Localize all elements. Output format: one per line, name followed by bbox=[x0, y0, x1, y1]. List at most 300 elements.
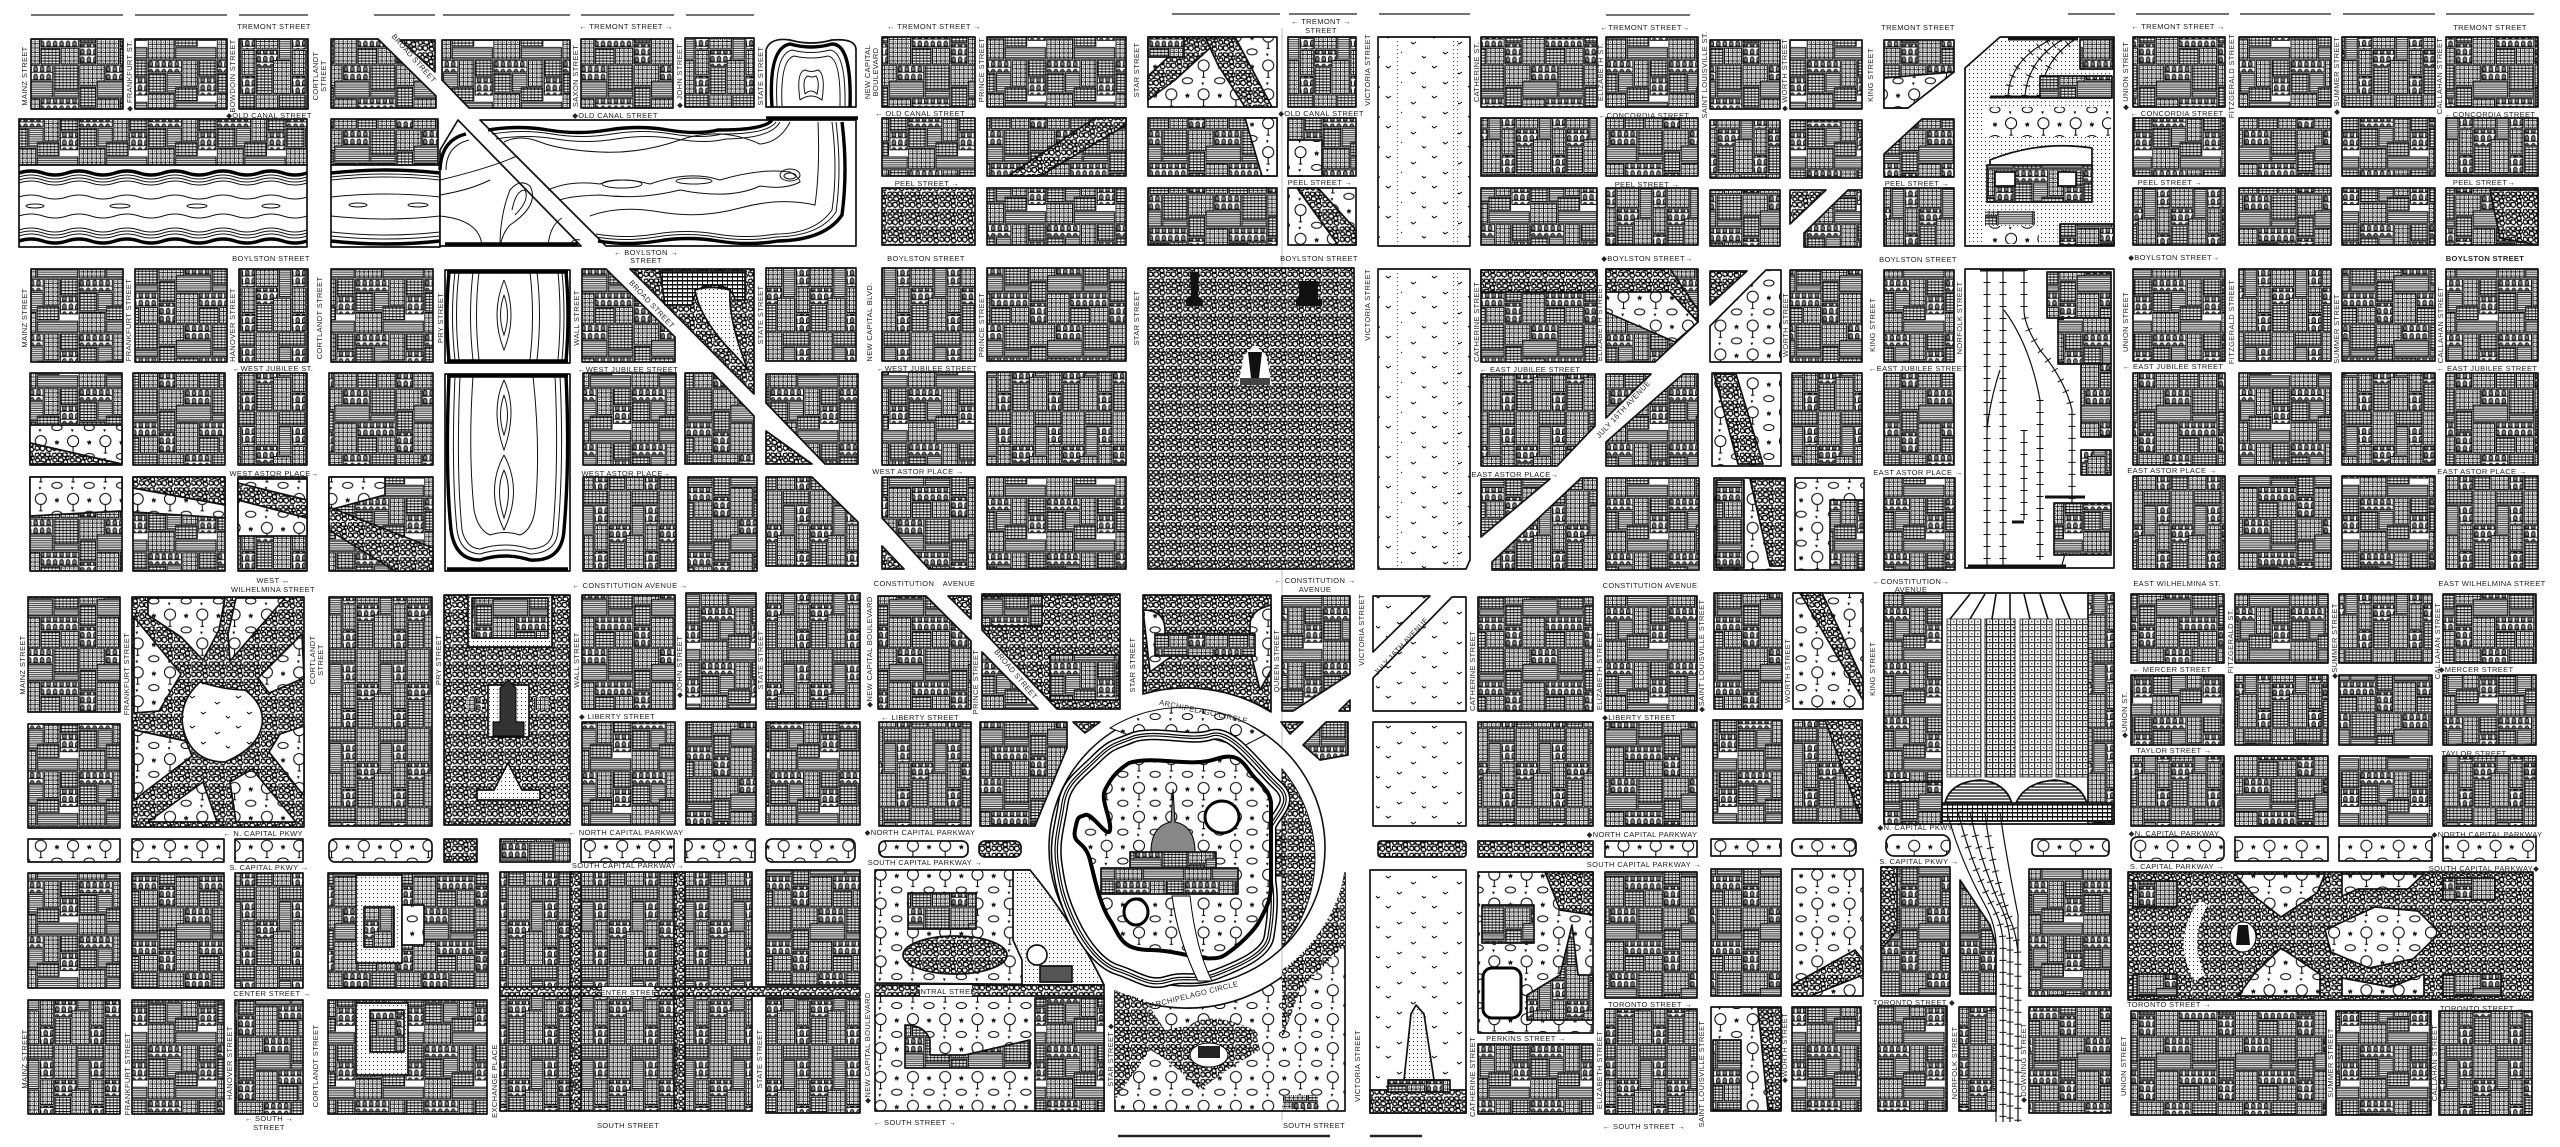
block: State Boylston bbox=[766, 268, 856, 361]
label: Pry Street: PRY STREET bbox=[434, 635, 443, 685]
block: Prince Boylston bbox=[987, 268, 1126, 361]
label: Street: STREET bbox=[319, 60, 328, 92]
label: Avenue: AVENUE bbox=[1895, 585, 1927, 594]
label: Concordia Street: ← CONCORDIA STREET bbox=[2131, 109, 2224, 118]
block: Union Boylston bbox=[2133, 269, 2225, 361]
building: Catherine Capital west bbox=[1482, 905, 1534, 943]
block: Mainz Capital bbox=[28, 873, 120, 988]
block: Saint Louisville Toronto bbox=[1711, 1007, 1781, 1111]
block: Fitzgerald Mercer bbox=[2235, 675, 2328, 745]
label: Boylston Street: ◆BOYLSTON STREET→ bbox=[1601, 254, 1693, 263]
label: Archipelago Circle north: ARCHIPELAGO CIRCLE bbox=[1159, 698, 1249, 725]
block: Mainz Liberty bbox=[28, 724, 120, 828]
label: Exchange Place: EXCHANGE PLACE bbox=[490, 1044, 499, 1118]
block: Worth Toronto bbox=[1792, 1007, 1861, 1111]
block: State Liberty bbox=[766, 722, 860, 825]
label: Street: STREET bbox=[253, 1123, 285, 1132]
label: Tremont Street: TREMONT STREET bbox=[1881, 23, 1955, 32]
lake: north basin at State Street bbox=[766, 39, 856, 107]
park: South Street lawn bbox=[875, 996, 1104, 1111]
parkway: New Capital bbox=[879, 841, 968, 857]
block: New Capital Astor bbox=[882, 477, 975, 569]
block: Worth Tremont bbox=[1790, 40, 1862, 109]
block: Frankfurt Boylston bbox=[135, 269, 227, 362]
label: Frankfurt Street: FRANKFURT STREET bbox=[122, 633, 131, 715]
parkway: Summer bbox=[2339, 837, 2432, 861]
statue: north-west warrior bbox=[1186, 272, 1203, 306]
block: Cortlandt Capital bbox=[328, 873, 488, 988]
block: Mainz Jubilee bbox=[30, 373, 122, 465]
label: Catherine St: CATHERINE ST. bbox=[1472, 42, 1481, 102]
park: Worth Wilhelmina bbox=[1793, 593, 1863, 709]
park: train station forecourt bbox=[1965, 37, 2114, 246]
label: John Street: ◆ JOHN STREET bbox=[675, 44, 684, 108]
block: Prince Old Canal bbox=[987, 118, 1126, 176]
lodge at South Street bbox=[1283, 1095, 1318, 1109]
sheet seam line bbox=[1281, 28, 1283, 1120]
label: Taylor Street: TAYLOR STREET → bbox=[2441, 749, 2517, 758]
block: Catherine Old Canal bbox=[1481, 118, 1597, 176]
label: Tremont Street: ← TREMONT STREET → bbox=[887, 22, 981, 31]
block: Union Toronto bbox=[2131, 1011, 2326, 1115]
cobble band: King Capital bbox=[1881, 867, 1897, 950]
garden: Mainz Astor bbox=[30, 477, 122, 516]
park: Victoria Street middle lawn bbox=[1378, 269, 1470, 569]
label: Toronto Street: TORONTO STREET → bbox=[2440, 1004, 2524, 1013]
cobble patch: Old City Wall bbox=[1606, 269, 1698, 322]
wedge: cobble triangle bbox=[882, 546, 904, 569]
label: South Street: ← SOUTH STREET → bbox=[874, 1118, 956, 1127]
park overlays on west blocks bbox=[30, 425, 433, 571]
garden: Star Old Canal bbox=[1245, 118, 1277, 176]
block: Fitzgerald Taylor bbox=[2235, 756, 2328, 826]
Archipelago disc: central island palace bbox=[1049, 708, 1325, 986]
label: Catherine Street: CATHERINE STREET bbox=[1468, 631, 1477, 711]
parkway: Union bbox=[2131, 837, 2224, 861]
block: financial district bbox=[500, 872, 752, 1111]
block: Summer Mercer bbox=[2339, 675, 2432, 745]
train shed halls bbox=[1947, 619, 2088, 777]
block: Prince Astor bbox=[987, 477, 1126, 569]
label: South Capital Parkway: SOUTH CAPITAL PARKWAY → bbox=[1587, 860, 1701, 869]
park: Victoria lawn with July 16th cut south bbox=[1373, 597, 1466, 711]
label: West Astor Place: WEST ASTOR PLACE→ bbox=[581, 469, 671, 478]
label: Elizabeth Street: ELIZABETH STREET bbox=[1595, 1031, 1604, 1109]
block: Callahan Boylston bbox=[2446, 269, 2538, 361]
block: Cortlandt Jubilee bbox=[329, 373, 433, 465]
park: Star Constitution bbox=[1143, 595, 1271, 712]
block: Callahan Taylor bbox=[2443, 756, 2536, 826]
label: Frankfurt Street: FRANKFURT STREET bbox=[124, 279, 133, 361]
label: East Jubilee Street: ←EAST JUBILEE STREET bbox=[1869, 364, 1967, 373]
block: New Capital Liberty bbox=[879, 722, 971, 826]
label: Frankfurt St: ◆ FRANKFURT ST. bbox=[125, 40, 134, 112]
side pavilion west bbox=[466, 698, 482, 710]
label text: Central Street: CENTRAL STREET bbox=[909, 987, 981, 996]
label: East Astor Place: EAST ASTOR PLACE → bbox=[1873, 468, 1963, 477]
block: Saint Louisville tower bbox=[1710, 270, 1781, 362]
label: Boylston Street: BOYLSTON STREET bbox=[1879, 255, 1957, 264]
terminal east buildings bbox=[2088, 593, 2114, 824]
block: Worth Concordia bbox=[1790, 120, 1862, 178]
label: Taylor Street: TAYLOR STREET → bbox=[2136, 746, 2212, 755]
label: Toronto Street: TORONTO STREET → bbox=[2127, 1000, 2211, 1009]
park: Victoria obelisk lawn bbox=[1370, 870, 1466, 1113]
parkway: Cortlandt bbox=[329, 839, 432, 862]
label: Worth Street: ◆WORTH STREET bbox=[1780, 1013, 1789, 1083]
cobble road: financial district verticals bbox=[500, 872, 860, 1111]
block: Union Jubilee bbox=[2133, 373, 2225, 465]
monument figures bbox=[1198, 1046, 1220, 1058]
label: Bowdoin Street: BOWDOIN STREET bbox=[228, 39, 237, 113]
parkway: Prince cobble bbox=[979, 841, 1021, 857]
label: Cortlandt Street: CORTLANDT STREET bbox=[315, 277, 324, 359]
garden: Frankfurt Astor bbox=[133, 488, 225, 518]
block: Catherine Capital bbox=[1478, 872, 1593, 1033]
parkway: Hanover bbox=[235, 839, 303, 862]
label: Boylston Street: ← BOYLSTON → bbox=[614, 248, 678, 257]
cobble band: Saint Louisville Toronto bbox=[1758, 1008, 1781, 1110]
label: Summer Street: ◆ SUMMER STREET bbox=[2332, 37, 2341, 115]
block: Cortlandt diagonal bbox=[331, 39, 436, 108]
label: John Street: JOHN STREET bbox=[673, 1035, 682, 1091]
label: Saxon Street: SAXON STREET bbox=[571, 45, 580, 107]
Archipelago district south-west park bbox=[875, 870, 1104, 1111]
block: State Center bbox=[766, 998, 860, 1113]
label: South Street: SOUTH STREET bbox=[597, 1121, 659, 1130]
block: July 16th south bbox=[1606, 374, 1698, 466]
park: Worth Capital bbox=[1792, 869, 1863, 996]
palace wings bbox=[1101, 852, 1238, 894]
label: New Capital: NEW CAPITAL bbox=[863, 45, 872, 99]
label: Victoria Street: VICTORIA STREET bbox=[1353, 1030, 1362, 1102]
label: Mercer Street: ← MERCER STREET bbox=[2132, 665, 2212, 674]
label: Cortlandt: CORTLANDT bbox=[311, 52, 320, 100]
wedge: circle north-west bbox=[1073, 722, 1100, 733]
central-west blocks bbox=[882, 37, 1356, 569]
label backing: Central Street bbox=[920, 985, 972, 996]
label: Liberty Street: ◆ LIBERTY STREET bbox=[579, 712, 655, 721]
cobble band: Saint Louisville Jubilee bbox=[1714, 374, 1763, 464]
block: Catherine Astor bbox=[1492, 478, 1597, 570]
parkway: Mainz bbox=[28, 839, 120, 862]
block: Prince Liberty bbox=[980, 722, 1067, 826]
label: Worth Street: WORTH STREET bbox=[1783, 639, 1792, 703]
block: Union Tremont bbox=[2133, 37, 2225, 107]
label: Old Canal Street: ◆OLD CANAL STREET bbox=[1278, 109, 1364, 118]
station arches bbox=[1945, 780, 2087, 803]
label: State Street: STATE STREET bbox=[756, 285, 765, 344]
park: Victoria lawn with July 16th cut north bbox=[1373, 596, 1430, 652]
terminal fan tracks bbox=[1950, 594, 2070, 619]
block: Broad Street east bbox=[442, 40, 570, 108]
canal: triangular basin bbox=[440, 120, 581, 246]
cobble band: Old City Wall bbox=[1008, 118, 1126, 176]
yard buildings bbox=[2047, 272, 2111, 555]
block: Summer Concordia bbox=[2342, 118, 2435, 176]
parkway: Saint Louisville bbox=[1711, 839, 1781, 856]
stadium complex bbox=[905, 1025, 1030, 1068]
island monument bbox=[1190, 1043, 1228, 1067]
block: Elizabeth Tremont bbox=[1606, 37, 1698, 107]
label: Saint Louisville Street: SAINT LOUISVILLE STREET bbox=[1697, 1021, 1706, 1127]
block: Elizabeth Constitution bbox=[1605, 596, 1697, 711]
plaza cobble at obelisk bbox=[1370, 1090, 1466, 1113]
label: West Astor Place: WEST ASTOR PLACE→ bbox=[229, 469, 319, 478]
label: Hanover Street: HANOVER STREET bbox=[228, 288, 237, 362]
clock tower bbox=[493, 680, 524, 736]
label: Archipelago Circle south: ARCHIPELAGO CIRCLE bbox=[1150, 979, 1239, 1010]
block: Wall Liberty bbox=[582, 722, 675, 825]
label: Mainz Street: MAINZ STREET bbox=[20, 1029, 29, 1089]
cobble strip: Catherine Boylston bbox=[1481, 270, 1597, 292]
block: Callahan Tremont bbox=[2446, 37, 2538, 107]
label: N. Capital Pkwy: ◆N. CAPITAL PKWY. bbox=[1877, 823, 1955, 832]
label: Wilhelmina Street: WILHELMINA STREET bbox=[231, 585, 315, 594]
label: Tremont Street: TREMONT STREET bbox=[2453, 23, 2527, 32]
label: Old Canal Street: ◆OLD CANAL STREET bbox=[226, 111, 312, 120]
block: Downing Capital bbox=[2029, 869, 2111, 996]
wedge: Saint Louisville statue bbox=[1710, 271, 1747, 305]
block: Cortlandt Astor bbox=[329, 477, 433, 571]
park: Frankfurt star garden bbox=[132, 597, 304, 827]
south-east blocks bbox=[1711, 593, 2536, 1115]
parkway: Frankfurt bbox=[132, 839, 224, 862]
block: Prince Tremont bbox=[987, 37, 1126, 107]
crowd patch bbox=[1985, 107, 2111, 137]
block: Norfolk Capital bbox=[1960, 880, 1996, 994]
label: Constitution Avenue: ← CONSTITUTION AVENUE → bbox=[572, 581, 688, 590]
label: Mainz Street: MAINZ STREET bbox=[20, 46, 29, 106]
building: Saint Louisville Toronto bbox=[1713, 1040, 1741, 1110]
block: Mainz Astor bbox=[30, 477, 122, 571]
canal: main Old Canal basin bbox=[480, 118, 858, 246]
garden: Cortlandt Astor bbox=[329, 477, 385, 510]
label: Fitzgerald Street: FITZGERALD STREET bbox=[2227, 280, 2236, 364]
block: Summer Wilhelmina bbox=[2339, 594, 2432, 663]
label: Star Street: STAR STREET ◆ bbox=[1106, 1022, 1115, 1087]
block: New Capital Jubilee bbox=[882, 372, 975, 465]
label: Boylston Street: BOYLSTON STREET bbox=[1280, 254, 1358, 263]
park: Victoria Liberty lawn bbox=[1373, 722, 1466, 826]
label: Catherine Street: CATHERINE STREET bbox=[1472, 282, 1481, 362]
equestrian statue bbox=[2230, 922, 2256, 952]
parkway: Downing bbox=[2032, 839, 2109, 856]
block: Mainz Center bbox=[28, 1000, 120, 1114]
block: Hanover Capital bbox=[235, 873, 303, 988]
cobble band: Worth Capital bbox=[1792, 950, 1863, 996]
label: Elizabeth Street: ELIZABETH STREET bbox=[1595, 632, 1604, 710]
label: Peel Street: PEEL STREET → bbox=[1885, 179, 1949, 188]
block: Elizabeth Liberty bbox=[1605, 722, 1697, 826]
building: Worth Astor bbox=[1830, 500, 1864, 570]
label: Old Canal Street: ← OLD CANAL STREET bbox=[875, 109, 965, 118]
parkway: Victoria cobble bbox=[1378, 841, 1466, 857]
block: Union Wilhelmina bbox=[2131, 594, 2224, 663]
label: John Street: ◆JOHN STREET bbox=[675, 636, 684, 698]
tree rows bbox=[1985, 211, 2035, 225]
block: King Concordia bbox=[1884, 119, 1954, 177]
parkway: Exchange bbox=[500, 839, 570, 862]
block: King Astor bbox=[1884, 478, 1955, 570]
label: Downing Street: ◆DOWNING STREET bbox=[2019, 1023, 2028, 1103]
block: Union Mercer bbox=[2131, 675, 2224, 745]
outer moat bbox=[1056, 734, 1285, 983]
block: Catherine Peel bbox=[1481, 188, 1597, 245]
label: State Street: STATE STREET bbox=[755, 1029, 764, 1088]
block: Frankfurt Center bbox=[132, 1000, 224, 1114]
block: State Jubilee bbox=[766, 374, 858, 464]
top edge bracket lines bbox=[31, 14, 2534, 15]
label: Mainz Street: MAINZ STREET bbox=[20, 288, 29, 348]
label: Union Street: ◆ UNION STREET bbox=[2121, 42, 2130, 110]
cobble causeway bbox=[1244, 830, 1282, 876]
label: Broad Street top: BROAD STREET bbox=[390, 32, 438, 85]
label: Concordia Street: ←CONCORDIA STREET bbox=[1599, 111, 1689, 120]
garden: Cortlandt Capital bbox=[402, 905, 424, 945]
block: Mainz Boylston bbox=[31, 269, 123, 362]
label: Constitution: ←CONSTITUTION→ bbox=[1873, 577, 1949, 586]
label: Hanover Street: HANOVER STREET bbox=[225, 1026, 234, 1100]
label: S. Capital Pkwy: S. CAPITAL PKWY → bbox=[229, 863, 309, 872]
label: Peel Street: PEEL STREET → bbox=[2138, 178, 2202, 187]
label: Constitution Avenue: CONSTITUTION AVENUE bbox=[1603, 581, 1697, 590]
block: Union Astor bbox=[2133, 476, 2225, 569]
block: Norfolk Toronto bbox=[1959, 1007, 1996, 1111]
palace bbox=[1155, 634, 1255, 656]
cobble path: park left arm bbox=[1148, 37, 1222, 100]
label: North Capital Parkway: ◆NORTH CAPITAL PARKWAY bbox=[865, 828, 975, 837]
inner island lawn bbox=[1075, 757, 1271, 958]
east pond bbox=[1205, 801, 1239, 833]
label: Liberty Street: ◆LIBERTY STREET bbox=[1602, 713, 1676, 722]
block: Hanover Boylston bbox=[239, 269, 308, 362]
river: lower Old Canal west bbox=[19, 165, 307, 247]
pavilions bbox=[2133, 878, 2501, 996]
label: Constitution: CONSTITUTION bbox=[874, 579, 934, 588]
label: West Wilhelmina: WEST ↔ bbox=[256, 576, 290, 585]
label: Broad Street lower: BROAD STREET bbox=[627, 278, 676, 330]
obelisk base bbox=[1388, 1080, 1450, 1092]
block: Elizabeth Boylston bbox=[1606, 269, 1698, 362]
south-central blocks bbox=[1370, 596, 1697, 1114]
block: Worth Boylston bbox=[1790, 270, 1862, 362]
plaza: great cobbled square bbox=[1148, 268, 1354, 569]
block: King Capital bbox=[1881, 867, 1950, 996]
block: John Astor bbox=[688, 477, 757, 571]
memorial arch bbox=[477, 763, 540, 800]
wedge: Prince triangle bbox=[948, 596, 971, 619]
label: Liberty Street: ← LIBERTY STREET bbox=[881, 713, 959, 722]
train terminal: glass sheds and fan bbox=[1884, 593, 2114, 824]
label: Summer Street: SUMMER STREET bbox=[2332, 294, 2341, 364]
block: Cortlandt Wilhelmina bbox=[329, 597, 432, 826]
label: Norfolk Street: NORFOLK STREET bbox=[1955, 282, 1964, 354]
label: Street: STREET bbox=[1305, 26, 1337, 35]
south-west blocks bbox=[28, 593, 860, 1114]
label: Summer Street: ◆SUMMER STREET bbox=[2330, 603, 2339, 679]
label: North Capital Parkway: ◆NORTH CAPITAL PARKWAY bbox=[1587, 830, 1697, 839]
walk: Cortlandt Center bbox=[356, 1003, 408, 1075]
bottom edge sheet shadow bbox=[1118, 1135, 1422, 1137]
block: Star Old Canal bbox=[1148, 118, 1277, 176]
block: Prince Peel bbox=[987, 188, 1126, 245]
park: Archipelago south garden bbox=[1115, 873, 1345, 1111]
wedge: circle north-east bbox=[1281, 722, 1303, 734]
label: South Street: SOUTH STREET bbox=[1283, 1121, 1345, 1130]
lawns and tree lobes bbox=[134, 598, 304, 822]
block: Star Peel bbox=[1148, 188, 1277, 245]
central lake lawn bbox=[182, 682, 262, 762]
pond: Catherine Capital bbox=[1483, 968, 1521, 1018]
block: Callahan Toronto bbox=[2439, 1011, 2532, 1115]
block: Summer Toronto bbox=[2336, 1011, 2431, 1115]
label: East Jubilee Street: ← EAST JUBILEE STREET bbox=[2437, 364, 2537, 373]
park: Victoria Street north lawn bbox=[1378, 37, 1470, 246]
block: Elizabeth Astor bbox=[1606, 478, 1699, 570]
block: Hanover Jubilee bbox=[238, 373, 307, 465]
label: Union Street: UNION STREET bbox=[2119, 1036, 2128, 1096]
label: State Street: STATE STREET bbox=[756, 46, 765, 105]
block: Catherine Tremont bbox=[1481, 37, 1597, 107]
block: Liberty and Capital north-west bbox=[878, 594, 1350, 857]
label: N. Capital Parkway: ◆N. CAPITAL PARKWAY bbox=[2129, 829, 2219, 838]
block: New Capital Old Canal bbox=[882, 118, 975, 176]
central-east blocks bbox=[1481, 37, 1699, 570]
label: Star Street: STAR STREET bbox=[1128, 637, 1137, 692]
block: New Capital Boylston bbox=[882, 268, 975, 361]
cobble band: Old City Wall bbox=[238, 483, 307, 518]
block: Saxon Street bbox=[581, 39, 673, 108]
block: Union Peel bbox=[2133, 188, 2225, 245]
block: Callahan Jubilee bbox=[2446, 373, 2538, 465]
block: Fitzgerald Boylston bbox=[2239, 269, 2331, 361]
neoclassical palace bbox=[908, 893, 976, 929]
block: State Capital bbox=[766, 870, 860, 985]
building: Saint Louisville Astor bbox=[1716, 480, 1744, 568]
yard tracks bbox=[1968, 270, 2085, 566]
block: Callahan Astor bbox=[2446, 476, 2538, 569]
river: Old Canal at Cortlandt bbox=[331, 165, 440, 247]
rail lines: north terminal bbox=[1990, 39, 2078, 97]
label: Victoria Street: VICTORIA STREET bbox=[1357, 594, 1366, 666]
palace spire and dome bbox=[1151, 789, 1195, 852]
parkway: Catherine cobble bbox=[1478, 841, 1593, 857]
block: Frankfurt Capital bbox=[132, 873, 224, 988]
block: Summer Boylston bbox=[2342, 269, 2435, 361]
label: Prince Street: PRINCE STREET bbox=[971, 650, 980, 714]
label: Center Street: CENTER STREET → bbox=[233, 989, 311, 998]
label: Prince Street: PRINCE STREET bbox=[977, 38, 986, 102]
garden: Queen Old Canal bbox=[1288, 140, 1322, 176]
block: King Jubilee bbox=[1884, 373, 1954, 465]
label: Summer Street: SUMMER STREET bbox=[2326, 1028, 2335, 1098]
label: Peel Street: PEEL STREET → bbox=[1288, 178, 1352, 187]
wedge: Queen small bbox=[1339, 700, 1350, 711]
label: Cortlandt: CORTLANDT bbox=[308, 636, 317, 684]
label: East Jubilee Street: ← EAST JUBILEE STREET bbox=[2123, 362, 2223, 371]
statue: central monument bbox=[1238, 345, 1272, 385]
label: South Street: ← SOUTH → bbox=[245, 1114, 293, 1123]
label: Street: STREET bbox=[630, 256, 662, 265]
block: Saint Louisville Mercer bbox=[1713, 720, 1782, 823]
block: Callahan Concordia bbox=[2446, 118, 2538, 176]
cobble band: Queen Peel bbox=[1297, 188, 1356, 245]
eastern-central blocks bbox=[1710, 40, 1955, 570]
building: Prince Constitution east bbox=[1050, 655, 1119, 700]
label: Toronto Street: TORONTO STREET ◆ bbox=[1873, 998, 1956, 1007]
label: Avenue: AVENUE bbox=[1299, 585, 1331, 594]
